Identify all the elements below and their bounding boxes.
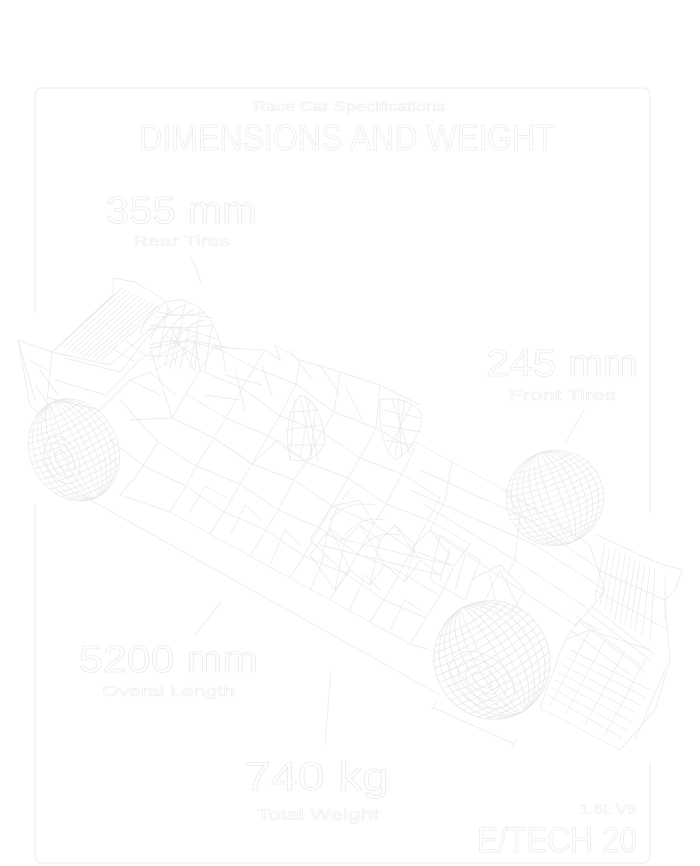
front wheel upper [493,437,617,559]
engine label: 1.6L V6 [580,801,636,818]
callout: rear tires: 355 mm [106,190,257,232]
car wireframe [12,278,682,750]
callout: front tires: Front Tires [509,387,616,404]
body mesh [110,340,470,650]
front wheel lower [412,579,572,741]
engine name: E/TECH 20 [477,821,637,860]
rear wing [18,278,175,420]
callout: overall length: 5200 mm [79,639,258,681]
rear wheel upper [140,300,226,372]
callout: rear tires [106,190,257,282]
callout: total weight: Total Weight [257,807,380,824]
dimension line [85,497,516,748]
callout: total weight [244,670,389,824]
frame border [35,88,650,863]
callout: overall length: Overal Length [102,683,235,700]
callout: front tires [486,343,638,442]
front wing [540,535,682,750]
title: DIMENSIONS AND WEIGHT [139,117,555,158]
rear wheel lower [12,384,136,516]
callout: rear tires: Rear Tires [133,233,230,250]
callout: total weight: 740 kg [244,755,389,799]
callout: front tires: 245 mm [486,343,638,385]
side pod strip [310,525,450,590]
nose [410,442,605,625]
callout: overall length [79,602,258,700]
subtitle: Race Car Specifications [253,98,445,114]
